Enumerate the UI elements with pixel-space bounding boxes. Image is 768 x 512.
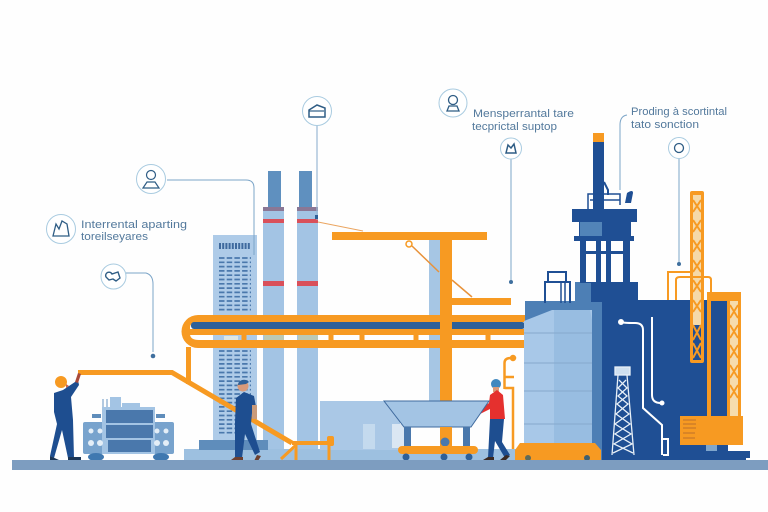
worker: left — [50, 373, 81, 460]
white lattice tower — [612, 367, 634, 455]
storage tank — [515, 310, 601, 461]
white pipes on plant — [619, 317, 668, 455]
machine cart — [83, 397, 174, 461]
blue plant block — [525, 282, 728, 461]
worker: middle — [231, 380, 261, 461]
callout: top icon — [302, 96, 332, 220]
tower building — [213, 235, 257, 441]
callout: clock icon — [668, 138, 690, 266]
crane — [318, 222, 511, 440]
side crane — [674, 292, 750, 461]
callout: hand icon — [500, 138, 522, 284]
lattice crane mast — [668, 191, 711, 363]
plinth — [184, 440, 529, 461]
small rooftop frame — [545, 272, 570, 303]
callout: international label: Interrental aparting — [81, 219, 187, 231]
right chimney — [297, 171, 318, 451]
callout: person icon with text — [439, 89, 574, 133]
conveyor pipe — [182, 314, 525, 384]
callout: gear icon, left — [101, 264, 155, 358]
callout: badge icon, left — [136, 164, 254, 255]
callout: person icon with text: tecprictal suptop — [472, 121, 557, 133]
callout: proding label — [620, 106, 727, 190]
left chimney — [263, 171, 284, 451]
callout: proding label: tato sonction — [631, 119, 699, 131]
orange feed pipe — [78, 372, 334, 460]
ground — [12, 460, 768, 470]
hopper cart — [384, 401, 489, 460]
low building — [320, 401, 404, 450]
callout: proding label: Proding à scortintal — [631, 106, 727, 118]
callout: person icon with text: Mensperrantal tare — [473, 108, 574, 120]
callout: international label — [46, 214, 187, 244]
worker: right — [478, 379, 510, 461]
standpipe — [504, 356, 515, 449]
callout: international label: toreilseyares — [81, 231, 149, 243]
refinery tower — [572, 133, 637, 283]
